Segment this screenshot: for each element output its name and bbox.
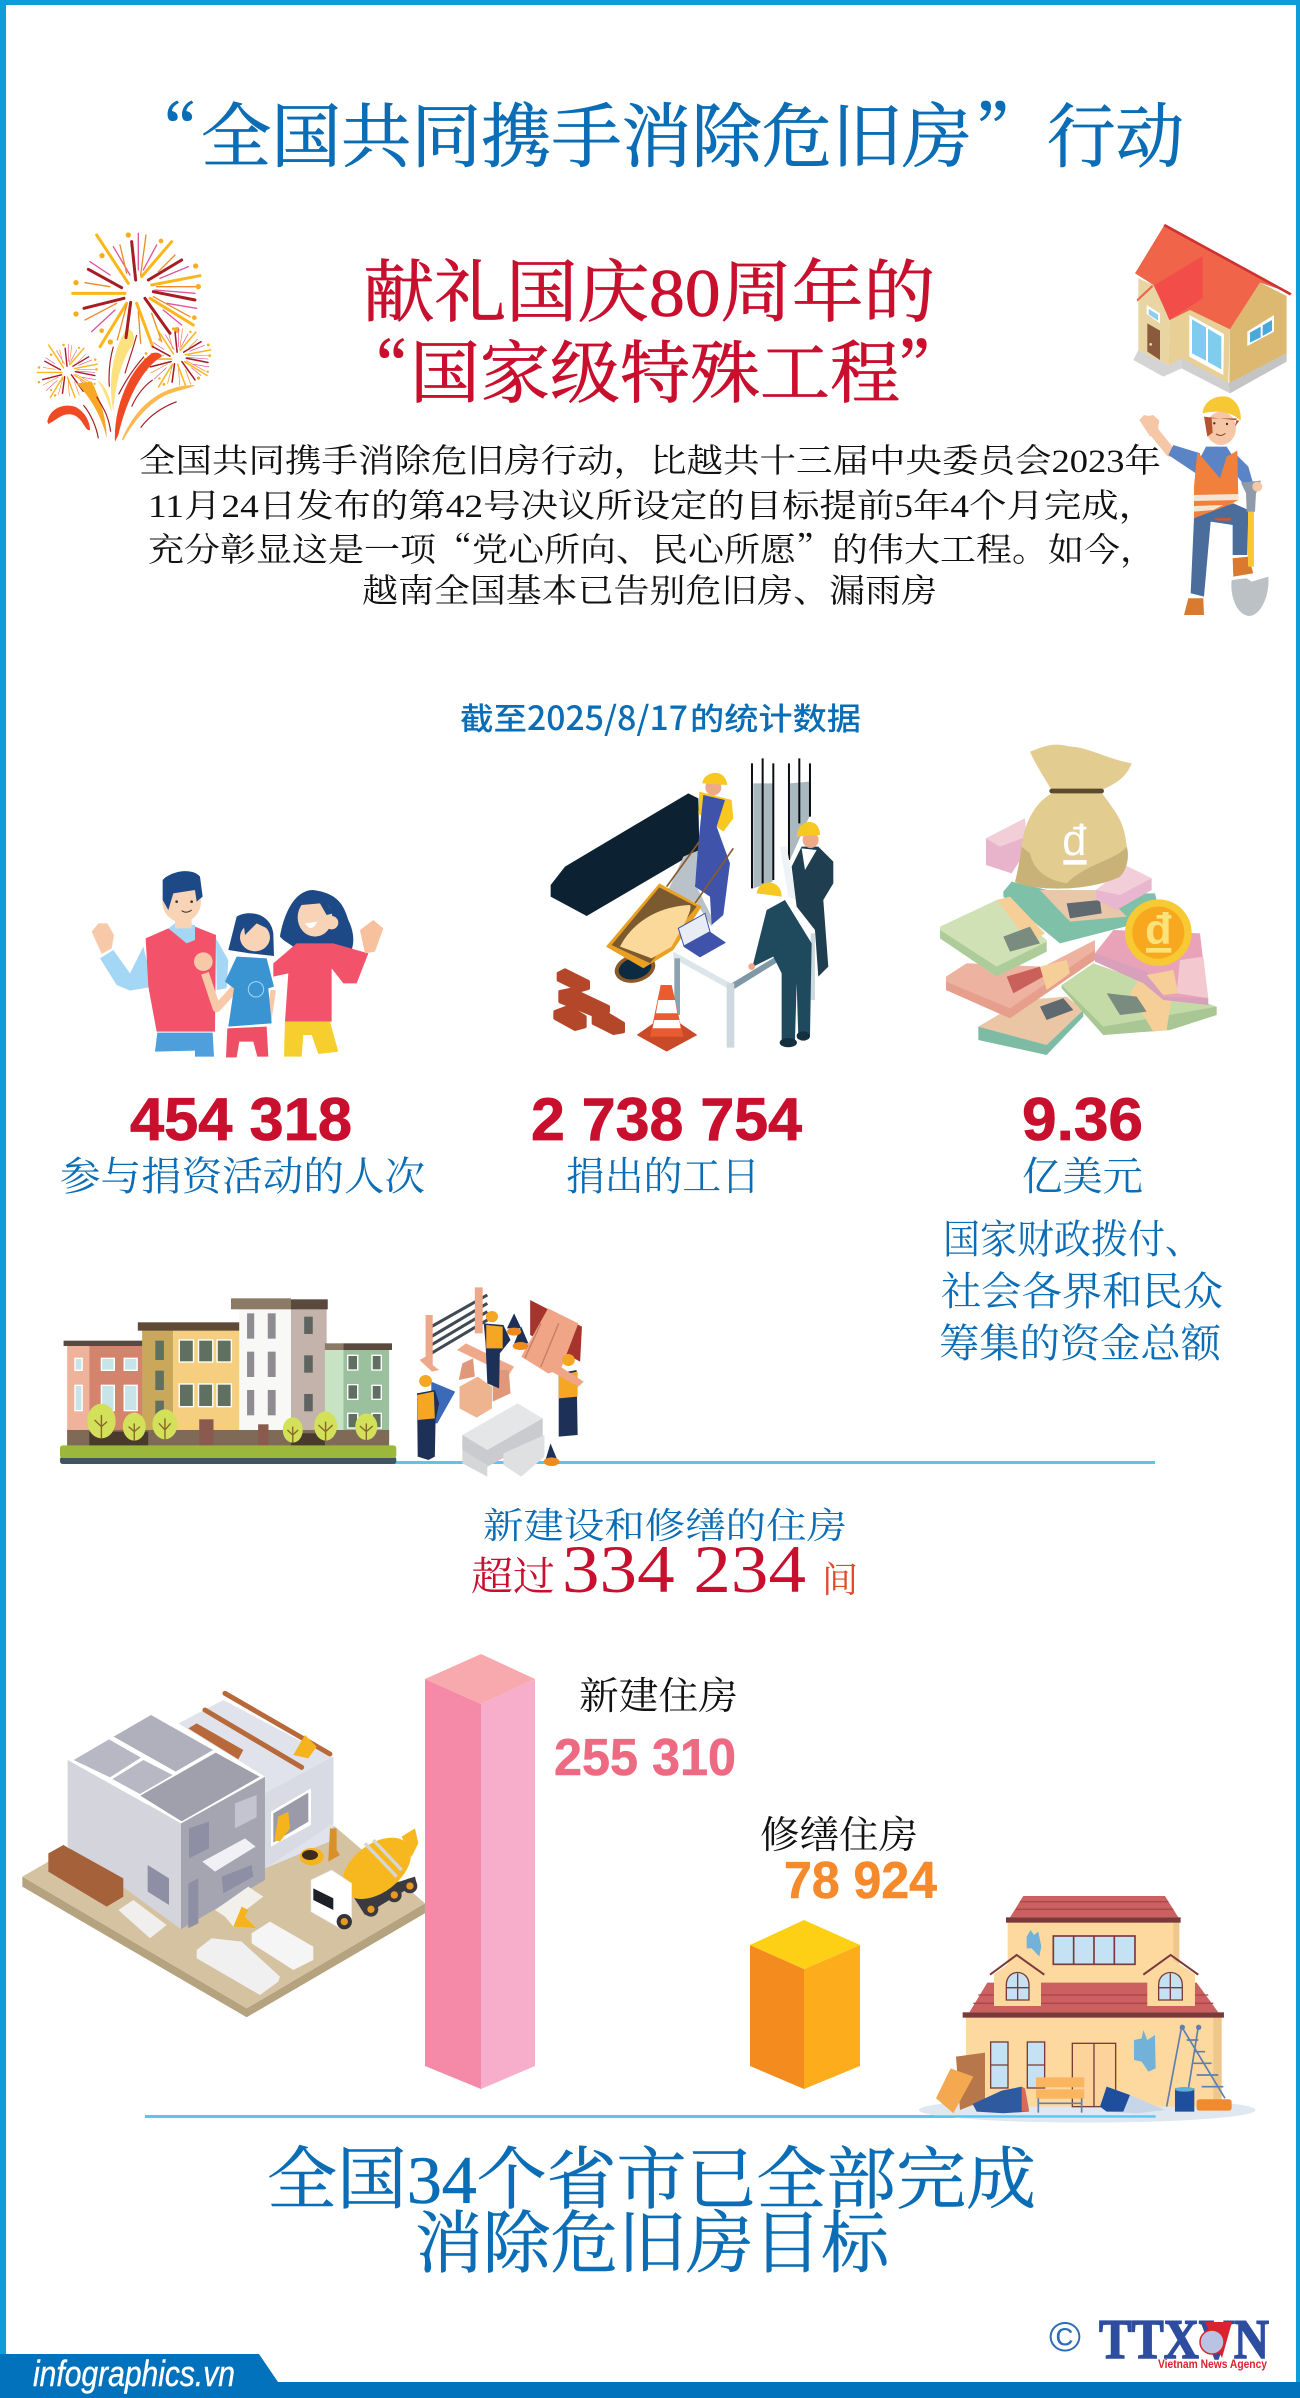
- illustration: repaired house: [910, 1896, 1256, 2123]
- stat: workdays: [531, 1086, 803, 1199]
- icon: row of buildings: [60, 1298, 396, 1464]
- intro paragraph: 充分彰显这是一项“党心所向、民心所愿”的伟大工程。如今，: [148, 524, 1156, 571]
- label: repaired houses: [760, 1815, 937, 1910]
- heading: houses total: [471, 1506, 858, 1607]
- stat: participants: 参与捐资活动的人次: [60, 1154, 425, 1199]
- icon: fireworks: [37, 232, 211, 442]
- icon: money pile: đ: [1145, 905, 1172, 953]
- heading: dedicated project: “: [341, 320, 409, 417]
- footer band: [0, 2353, 1300, 2398]
- intro paragraph: 11月24日发布的第42号决议所设定的目标提前5年4个月完成，: [148, 488, 1156, 525]
- heading: houses total: 间: [822, 1560, 858, 1600]
- stat: participants: 454 318: [130, 1086, 352, 1153]
- conclusion text: 消除危旧房目标: [415, 2206, 891, 2282]
- stats date label: [460, 692, 861, 740]
- label: repaired houses: 78 924: [784, 1852, 937, 1910]
- illustration: construction site: [22, 1693, 425, 2017]
- stat: workdays: 2 738 754: [531, 1086, 803, 1153]
- icon: builders at work: [417, 1287, 584, 1477]
- conclusion text: [267, 2142, 1036, 2282]
- stats date label: 截至: [460, 694, 527, 739]
- icon: money pile: đ: [1062, 817, 1086, 865]
- label: repaired houses: 修缮住房: [760, 1815, 918, 1857]
- intro paragraph: 越南全国基本已告别危旧房、漏雨房: [362, 573, 937, 610]
- stat: funding: 筹集的资金总额: [939, 1321, 1222, 1366]
- label: new houses: 255 310: [554, 1729, 736, 1787]
- logo: TTXVN copyright: ©: [1049, 2313, 1081, 2360]
- stats date label: 的统计数据: [690, 694, 861, 739]
- heading: dedicated project: ”: [897, 320, 965, 417]
- heading: houses total: 新建设和修缮的住房: [483, 1506, 847, 1546]
- intro paragraph: 全国共同携手消除危旧房行动，比越共十三届中央委员会2023年: [139, 443, 1161, 480]
- stats date label: 2025/8/17: [527, 692, 688, 740]
- label: new houses: [554, 1676, 738, 1787]
- icon: house: [1133, 224, 1292, 393]
- title: 行动: [1047, 81, 1184, 182]
- stat: workdays: 捐出的工日: [566, 1154, 760, 1199]
- intro paragraph: [139, 443, 1161, 610]
- footer band: infographics.vn: [33, 2353, 235, 2394]
- icon: construction workers: [551, 758, 833, 1052]
- icon: waving worker: [1139, 396, 1269, 616]
- heading: houses total: 超过: [471, 1554, 555, 1599]
- stat: funding: 9.36: [1022, 1086, 1143, 1153]
- logo: TTXVN copyright: Vietnam News Agency: [1158, 2357, 1267, 2371]
- title: 全国共同携手消除危旧房: [201, 81, 972, 182]
- heading: dedicated project: [341, 255, 965, 417]
- stat: funding: 亿美元: [1022, 1154, 1143, 1199]
- stat: funding: [939, 1086, 1223, 1366]
- stat: participants: [60, 1086, 425, 1199]
- heading: dedicated project: 国家级特殊工程: [410, 320, 900, 417]
- stat: funding: 国家财政拨付、: [943, 1217, 1202, 1262]
- bar: repaired houses: [750, 1920, 860, 2089]
- logo: TTXVN copyright: TTXVN: [1099, 2309, 1269, 2371]
- bar: new houses: [425, 1654, 535, 2089]
- heading: dedicated project: 献礼国庆80周年的: [363, 255, 935, 331]
- logo: TTXVN copyright: [1049, 2309, 1269, 2371]
- icon: family: [92, 871, 383, 1057]
- conclusion text: 全国34个省市已全部完成: [267, 2142, 1036, 2218]
- title: “: [128, 81, 198, 182]
- title: ”: [975, 81, 1045, 182]
- label: new houses: 新建住房: [579, 1676, 738, 1718]
- icon: money pile: [940, 745, 1217, 1055]
- stat: funding: 社会各界和民众: [941, 1269, 1223, 1314]
- heading: houses total: 334 234: [562, 1531, 806, 1607]
